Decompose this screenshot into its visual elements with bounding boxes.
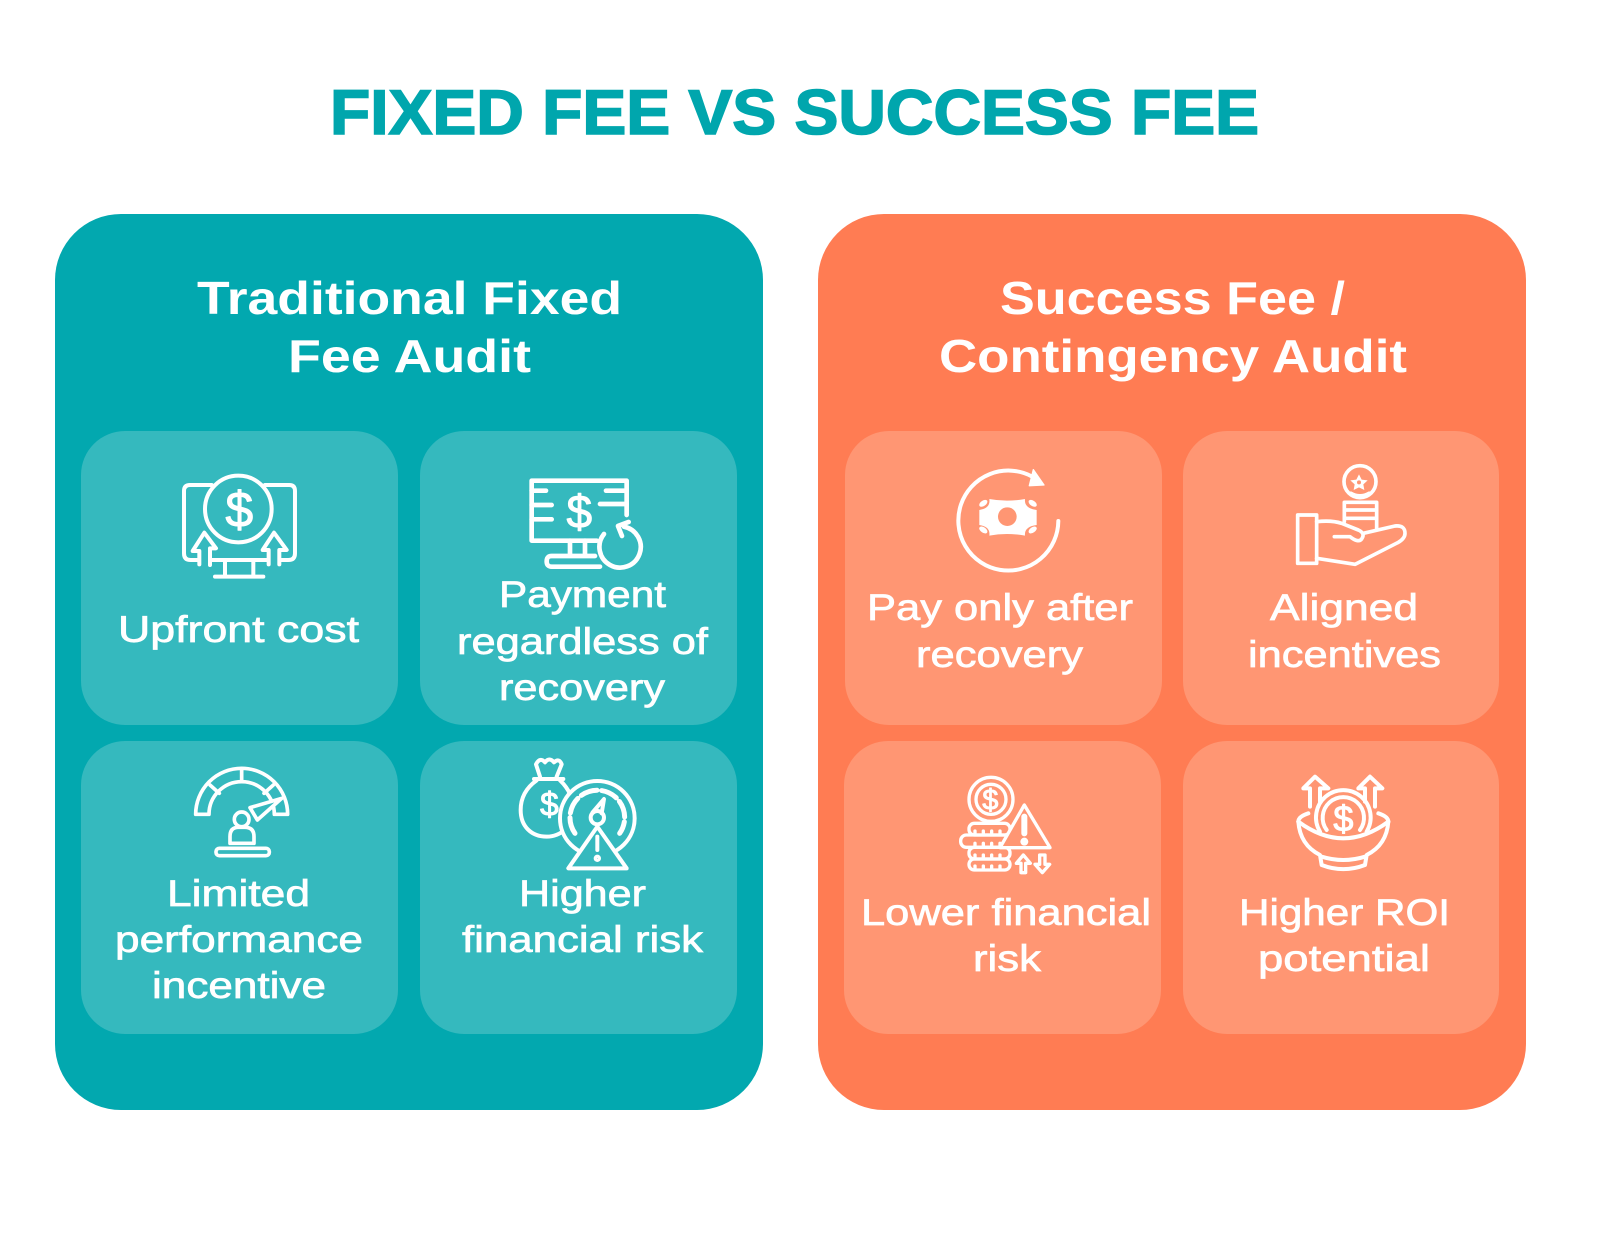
- icon: coins with warning and arrows: [961, 777, 1050, 873]
- card: limited performance incentive: [81, 741, 398, 1034]
- title: FIXED FEE VS SUCCESS FEE: [330, 78, 1259, 148]
- heading: success fee contingency audit: Success Fee /: [1000, 272, 1345, 324]
- label: limited performance incentive: incentive: [152, 965, 326, 1006]
- label: higher roi potential: [1239, 892, 1450, 979]
- icon: monitor with recurring arrow: [532, 481, 641, 568]
- heading: success fee contingency audit: Contingency Audit: [939, 330, 1407, 382]
- label: payment regardless of recovery: regardless of: [457, 621, 709, 662]
- label: aligned incentives: [1248, 587, 1441, 675]
- heading: success fee contingency audit: [939, 272, 1407, 382]
- label: pay only after recovery: Pay only after: [867, 587, 1133, 628]
- icon: hand holding coins: [1298, 466, 1405, 564]
- icon: monitor with dollar coin and arrows: $: [225, 481, 253, 537]
- icon: monitor with recurring arrow: $: [567, 485, 592, 537]
- label: higher financial risk: financial risk: [462, 919, 704, 960]
- card: pay only after recovery: [845, 431, 1162, 725]
- label: limited performance incentive: Limited: [167, 873, 310, 914]
- label: lower financial risk: Lower financial: [861, 892, 1151, 933]
- label: aligned incentives: incentives: [1248, 634, 1441, 675]
- card: aligned incentives: [1183, 431, 1499, 725]
- card: higher financial risk: [420, 741, 737, 1034]
- card: payment regardless of recovery: [420, 431, 737, 725]
- label: pay only after recovery: recovery: [916, 634, 1084, 675]
- label: payment regardless of recovery: [457, 574, 709, 708]
- label: aligned incentives: Aligned: [1270, 587, 1418, 628]
- label: upfront cost: Upfront cost: [118, 609, 360, 650]
- icon: bowl with coin and arrows: [1298, 777, 1388, 869]
- icon: bowl with coin and arrows: $: [1333, 798, 1353, 839]
- label: limited performance incentive: performance: [115, 919, 363, 960]
- heading: traditional fixed fee audit: Traditional Fixed: [197, 272, 622, 324]
- heading: traditional fixed fee audit: Fee Audit: [288, 330, 531, 382]
- icon: banknote in circular arrow: [958, 470, 1058, 571]
- label: payment regardless of recovery: Payment: [499, 574, 667, 615]
- label: limited performance incentive: [115, 873, 363, 1006]
- panel: success fee contingency audit: [818, 214, 1526, 1110]
- icon: performance gauge and person: [196, 768, 288, 856]
- label: higher roi potential: Higher ROI: [1239, 892, 1450, 933]
- icon: coins with warning and arrows: $: [982, 785, 998, 817]
- label: lower financial risk: risk: [973, 938, 1042, 979]
- card: upfront cost: [81, 431, 398, 725]
- label: payment regardless of recovery: recovery: [499, 667, 666, 708]
- icon: monitor with dollar coin and arrows: [184, 476, 295, 577]
- label: higher financial risk: [462, 873, 704, 960]
- label: lower financial risk: [861, 892, 1151, 979]
- card: lower financial risk: [844, 741, 1161, 1034]
- label: higher roi potential: potential: [1258, 938, 1430, 979]
- label: pay only after recovery: [867, 587, 1133, 675]
- icon: money bag, gauge and warning: $: [540, 787, 559, 824]
- label: higher financial risk: Higher: [519, 873, 646, 914]
- panel: traditional fixed fee audit: [55, 214, 763, 1110]
- card: higher roi potential: [1183, 741, 1499, 1034]
- icon: money bag, gauge and warning: [521, 759, 635, 868]
- heading: traditional fixed fee audit: [197, 272, 622, 382]
